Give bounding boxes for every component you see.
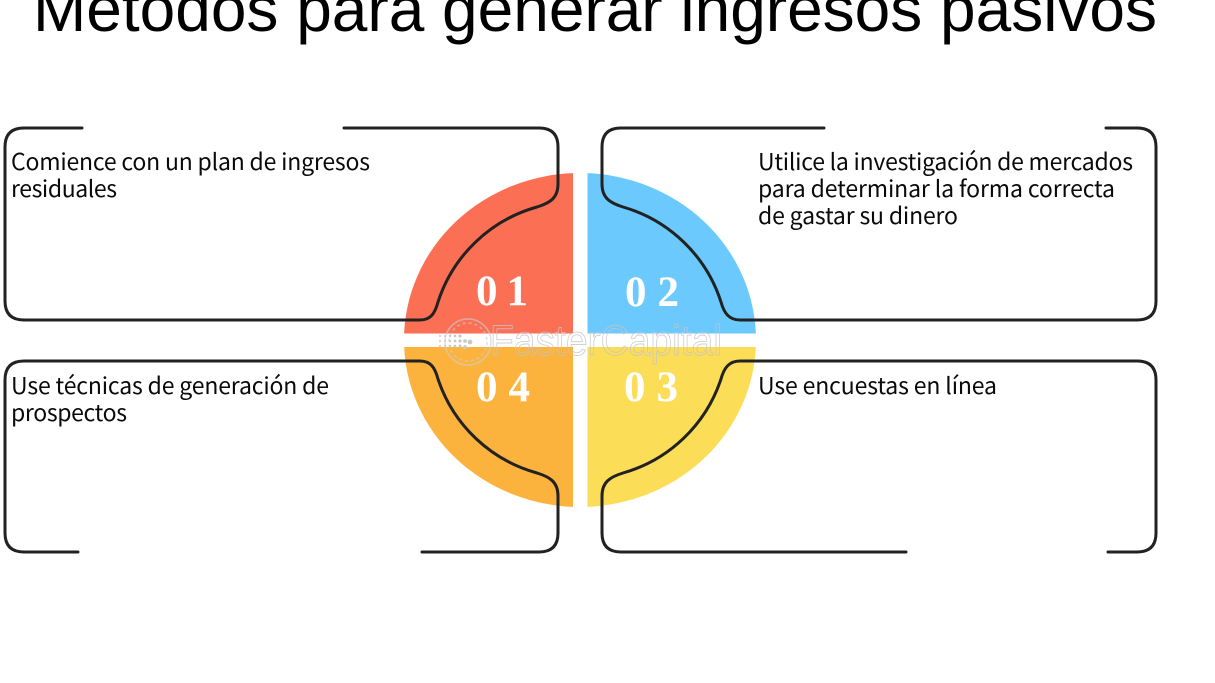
quadrant 01: red [404,173,573,334]
number 01: 0 1 [476,268,528,315]
text block 04: Use técnicas de generación de [11,367,329,401]
frame 04 [5,361,558,552]
watermark [439,317,722,365]
text block 02: Utilice la investigación de mercados [758,143,1133,177]
frame 02 [602,128,1156,320]
quadrant 02: blue [588,173,756,334]
frame 03 [602,361,1156,552]
text block 02: para determinar la forma correcta [758,170,1115,204]
quadrant 04: orange [404,347,573,507]
text block 02 [758,143,1133,231]
text block 01: residuales [11,170,117,204]
watermark dots [439,334,472,349]
number 02: 0 2 [625,269,679,316]
text block 03: Use encuestas en línea [758,367,997,401]
number 03: 0 3 [624,364,678,411]
text block 04 [11,367,329,428]
circle diagram [404,173,756,507]
number 04: 0 4 [476,364,530,411]
text block 02: de gastar su dinero [758,197,958,231]
text block 04: prospectos [11,394,127,428]
frame 01 [5,128,558,320]
quadrant 03: yellow [588,347,756,507]
watermark icon [445,319,491,365]
text block 01: Comience con un plan de ingresos [11,143,370,177]
watermark text: FasterCapital [490,317,722,365]
text block 01 [11,143,370,204]
